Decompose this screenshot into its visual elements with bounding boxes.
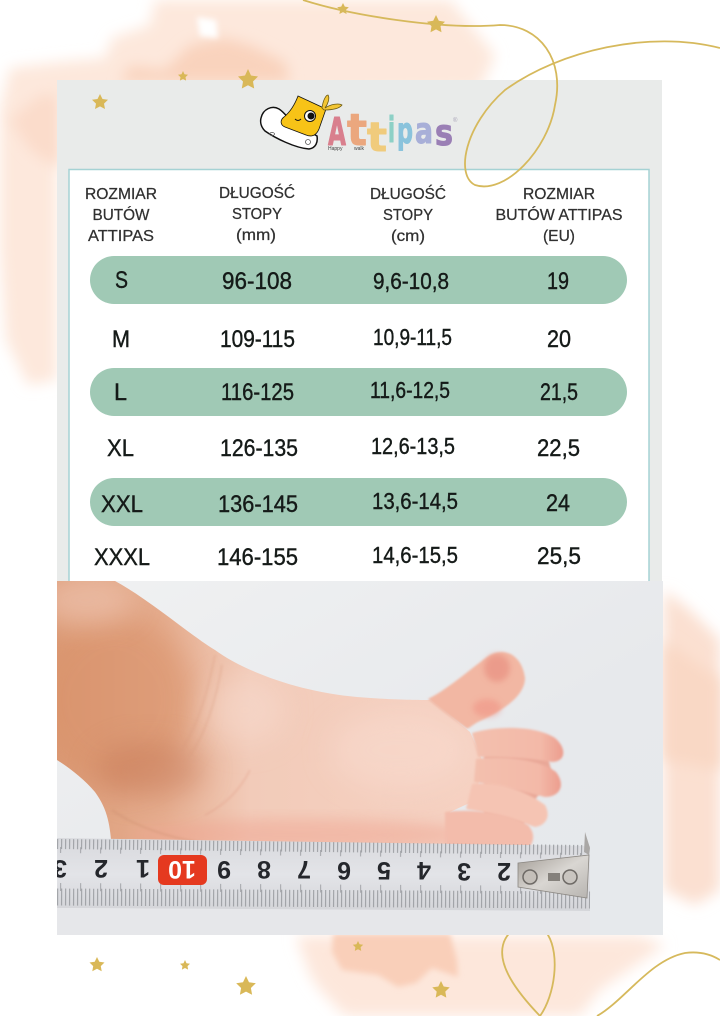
column headers: ROZMIAR [85,186,157,203]
gold swirl lines [303,0,720,1016]
fifth toe [445,811,533,850]
foot body [57,581,482,844]
row XXXL: 14,6-15,5 [372,542,458,568]
tape numbers: 9 [217,855,231,883]
column headers: BUTÓW ATTIPAS [496,205,622,224]
table card [69,170,649,590]
red ten marker [158,855,207,885]
row XXL: 136-145 [218,491,298,518]
column headers: ATTIPAS [88,228,154,245]
row XXL [90,478,627,526]
tape numbers: 7 [297,855,311,883]
third toe [474,758,561,797]
wordmark: t [367,115,387,161]
row M: 10,9-11,5 [373,324,452,350]
row L: 11,6-12,5 [370,377,450,403]
row XXXL: 146-155 [217,544,298,571]
second toe [472,728,563,762]
gold stars [90,3,450,998]
column headers: DŁUGOŚĆ [219,183,295,202]
row XXXL: 25,5 [537,543,581,570]
row L: L [114,379,127,406]
row XL: 22,5 [537,435,580,462]
wordmark: i [388,110,395,151]
tape numbers: 4 [417,856,431,884]
row XL: 126-135 [220,435,298,462]
tick marks [57,844,590,900]
wordmark: s [435,113,453,154]
tape metal hook [518,832,590,898]
row XXL: 13,6-14,5 [372,488,458,514]
wordmark: p [397,111,413,152]
tape numbers: 3 [457,857,471,885]
column headers: DŁUGOŚĆ [370,184,446,203]
wordmark: ® [453,117,458,124]
column headers: STOPY [232,206,282,223]
column headers: (cm) [391,228,425,245]
row XXL: 24 [546,490,570,517]
fourth toe [466,783,548,827]
column headers: (EU) [543,228,575,245]
tape numbers [57,860,510,881]
tape numbers: 8 [257,855,271,883]
tape numbers: 3 [53,854,67,882]
row M: 20 [547,326,571,353]
tape numbers: 2 [497,857,511,885]
row L: 21,5 [540,379,578,406]
wordmark: t [347,105,367,156]
red ten marker: 10 [168,855,196,883]
column headers: STOPY [383,207,433,224]
row S: 9,6-10,8 [373,268,449,294]
row XXXL [94,546,580,568]
row XXL: XXL [101,491,143,518]
column headers: ROZMIAR [523,186,595,203]
wordmark [328,105,458,161]
row M: M [112,326,130,353]
column headers: BUTÓW [92,205,150,224]
toe shadow backing [483,756,552,824]
row M: 109-115 [220,326,295,353]
row S: 96-108 [222,268,292,295]
column headers: (mm) [236,227,276,244]
row M [114,328,570,348]
measuring tape [57,832,590,911]
row S [90,256,627,304]
row L [90,368,627,416]
tape numbers: 5 [377,856,391,884]
wordmark: Happy [328,146,343,152]
baby foot [35,575,563,851]
row L: 116-125 [221,379,294,406]
row S: S [115,267,128,294]
row S: 19 [547,268,569,295]
row XL [107,438,580,460]
row XXXL: XXXL [94,544,150,571]
tape numbers: 6 [337,856,351,884]
row XL: 12,6-13,5 [371,433,455,459]
column headers [85,183,622,245]
table panel background [57,80,662,582]
row XL: XL [107,435,134,462]
attipas logo [261,95,458,161]
icon: shoe mascot [261,95,342,149]
wordmark: walk [354,146,365,152]
big toe [428,652,525,728]
tape numbers: 1 [136,854,150,882]
tape numbers: 2 [94,854,108,882]
wordmark: A [328,110,346,154]
photo: baby foot and measuring tape [35,575,663,936]
wordmark: a [415,111,433,152]
